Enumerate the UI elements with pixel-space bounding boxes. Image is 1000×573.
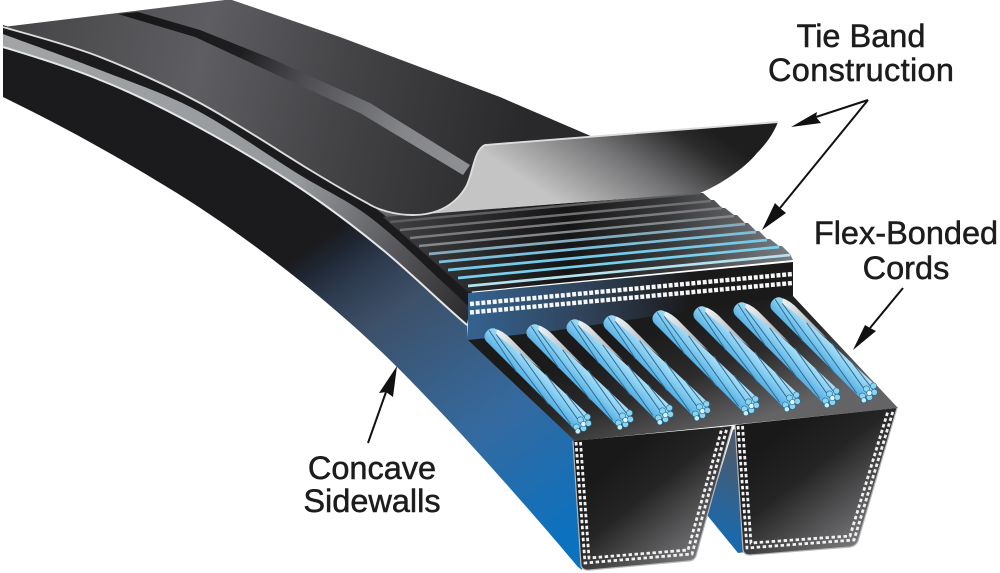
arrow: to ribs [762,100,868,230]
cord 5 [647,305,763,419]
rear reinforcing wall [468,262,793,342]
top surface groove [118,12,470,175]
label: Tie Band Construction: Tie Band [797,18,925,54]
gray side strip [3,30,472,325]
label: Flex-Bonded Cords: Flex-Bonded [814,215,998,251]
cord 8 [765,292,881,406]
belt side wall [3,40,582,570]
white strip edge line [3,47,467,325]
cord 4 [598,310,714,424]
peeled tie band flap [413,122,778,215]
label: Tie Band Construction: Construction [768,52,954,88]
cord 3 [561,314,677,428]
cord 1 [479,323,595,437]
tie band ribs [383,193,793,292]
label: Concave Sidewalls [303,450,441,519]
belt top surface [3,0,600,225]
cord dots [470,274,792,312]
label: Concave Sidewalls: Concave [308,450,436,486]
black strip [3,25,472,306]
arrow: to tie band flap [791,100,868,127]
label: Tie Band Construction [768,18,954,88]
cord 7 [728,297,844,411]
cord 6 [688,301,804,415]
front face right rib [735,408,897,555]
groove between ribs [707,428,746,553]
arrow: to sidewall [368,366,397,443]
label: Flex-Bonded Cords [814,215,998,286]
front face left rib [573,426,732,570]
cord 2 [521,319,637,433]
label: Concave Sidewalls: Sidewalls [303,483,441,519]
label: Flex-Bonded Cords: Cords [863,250,949,286]
cord bed [468,296,898,441]
arrow: to cords [853,288,903,350]
flap and top surface edge line [3,27,778,215]
